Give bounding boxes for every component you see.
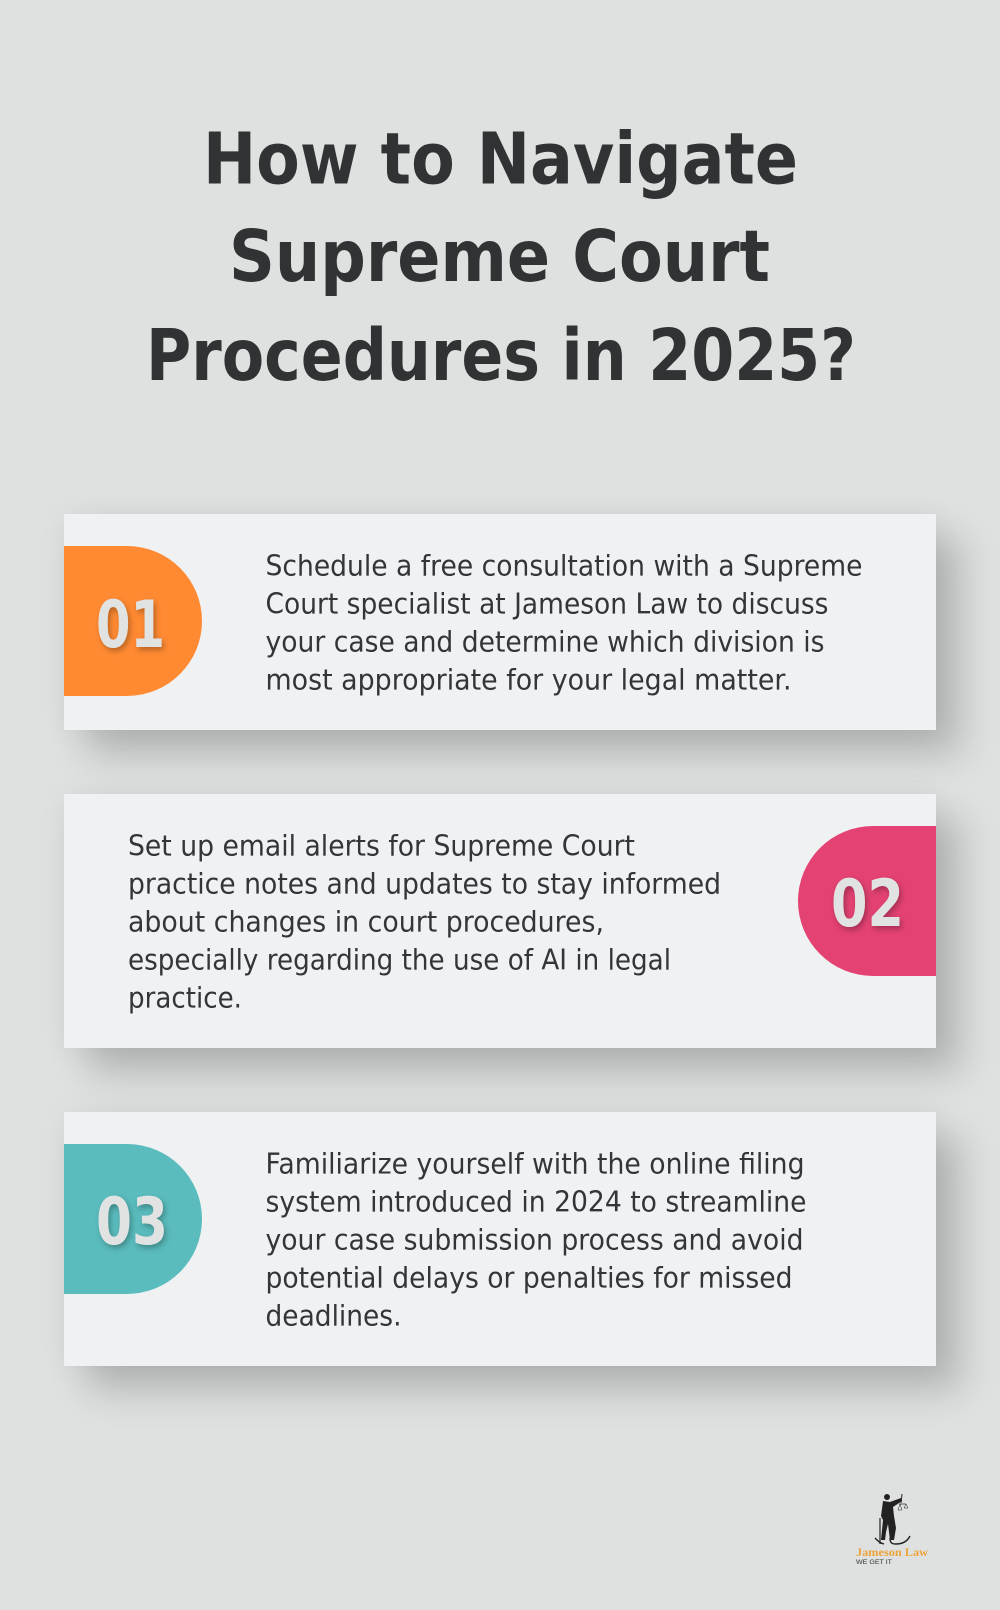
text: brand name: Jameson Law [856,1545,928,1559]
text: step 02 description: Set up email alerts for Supreme Court [128,830,635,862]
text: tagline: WE GET IT [856,1559,892,1566]
badge: 02 [798,826,936,976]
text: step 01 description: most appropriate for your legal matter. [266,664,792,696]
text: step 01 description: your case and determine which division is [266,626,824,658]
badge: 03: 03 [96,1185,168,1260]
icon: lady justice [875,1494,910,1544]
title: How to Navigate [203,118,798,200]
text: step 03 description: deadlines. [266,1300,402,1332]
badge: 02: 02 [831,867,904,942]
text: step 02 description [128,830,721,1014]
text: step 01 description [266,550,862,696]
text: step 02 description: about changes in court procedures, [128,906,604,938]
text: step 01 description: Schedule a free consultation with a Supreme [266,550,862,582]
title: Supreme Court [229,215,770,298]
logo: Jameson Law [856,1494,928,1566]
title: Procedures in 2025? [146,314,856,397]
title [146,118,856,397]
text: step 02 description: practice notes and updates to stay informed [128,868,721,900]
text: step 03 description: system introduced in 2024 to streamline [266,1186,806,1218]
text: step 01 description: Court specialist at Jameson Law to discuss [266,588,828,620]
text: step 02 description: especially regarding the use of AI in legal [128,944,671,976]
badge: 01: 01 [96,588,165,663]
text: step 03 description: Familiarize yourself with the online filing [266,1148,804,1180]
badge: 03 [64,1144,202,1294]
text: step 02 description: practice. [128,982,242,1014]
panel: step 02 [64,794,936,1048]
panel: step 01 [64,514,936,730]
panel: step 03 [64,1112,936,1366]
text: step 03 description: your case submission process and avoid [266,1224,804,1256]
text: step 03 description: potential delays or penalties for missed [266,1262,792,1294]
text: step 03 description [266,1148,806,1332]
badge: 01 [64,546,202,696]
